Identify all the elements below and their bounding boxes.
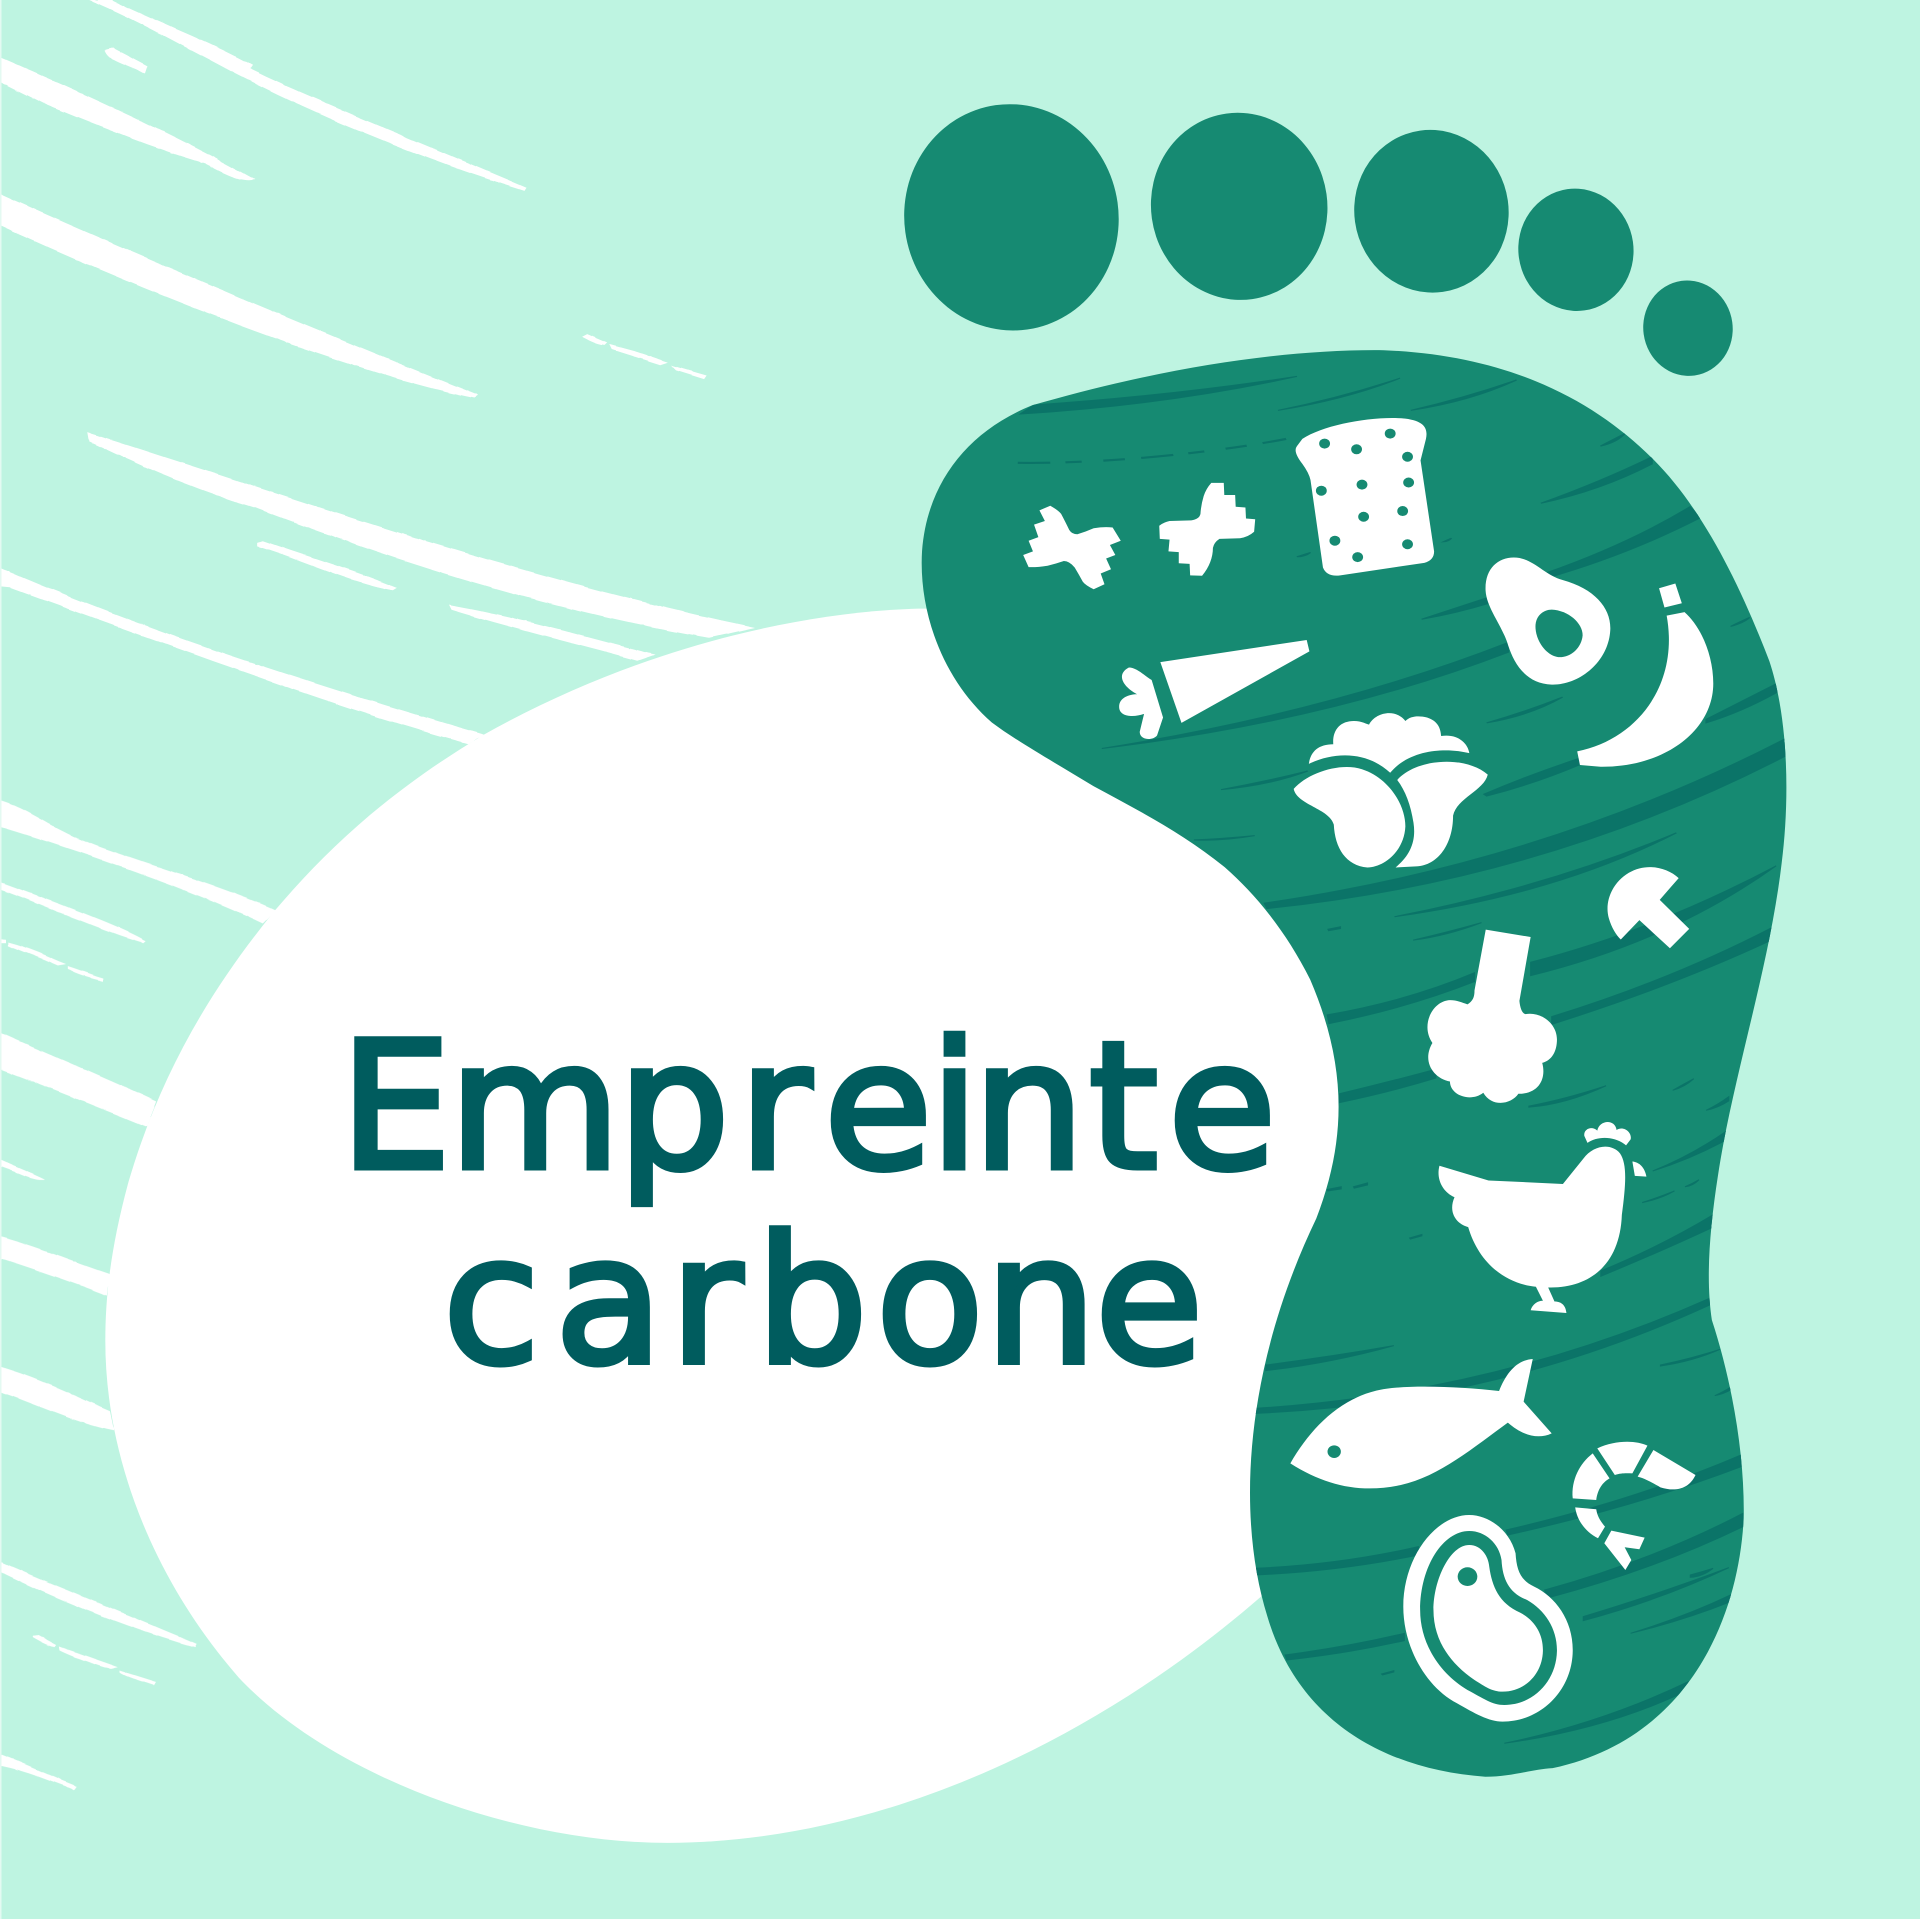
icon: banana: [1577, 584, 1713, 767]
icon: farfalle pasta left: [1023, 506, 1121, 589]
toes: [890, 90, 1739, 382]
white blob panel: [105, 609, 1347, 1843]
title line 2: carbone: [443, 1199, 1203, 1404]
icon: chicken: [1439, 1122, 1646, 1313]
title line 1: Empreinte: [340, 1004, 1276, 1210]
icon: steak: [1403, 1515, 1573, 1722]
white brush strokes: [0, 0, 755, 1790]
foot sole: [922, 350, 1786, 1777]
icon: broccoli: [1427, 930, 1557, 1103]
icon: mushroom: [1608, 867, 1689, 948]
icon: avocado: [1486, 557, 1610, 685]
icon: bread slice: [1296, 418, 1434, 576]
icon: shrimp: [1573, 1442, 1696, 1570]
left edge highlight: [0, 0, 2, 1919]
foot texture streaks: [1018, 376, 1788, 1743]
icon: fish: [1290, 1359, 1552, 1488]
icon: carrot: [1119, 640, 1309, 739]
icon: farfalle pasta right: [1159, 483, 1255, 576]
title: [340, 1004, 1276, 1404]
icon: lettuce: [1294, 713, 1488, 867]
food icons: [1023, 418, 1713, 1722]
